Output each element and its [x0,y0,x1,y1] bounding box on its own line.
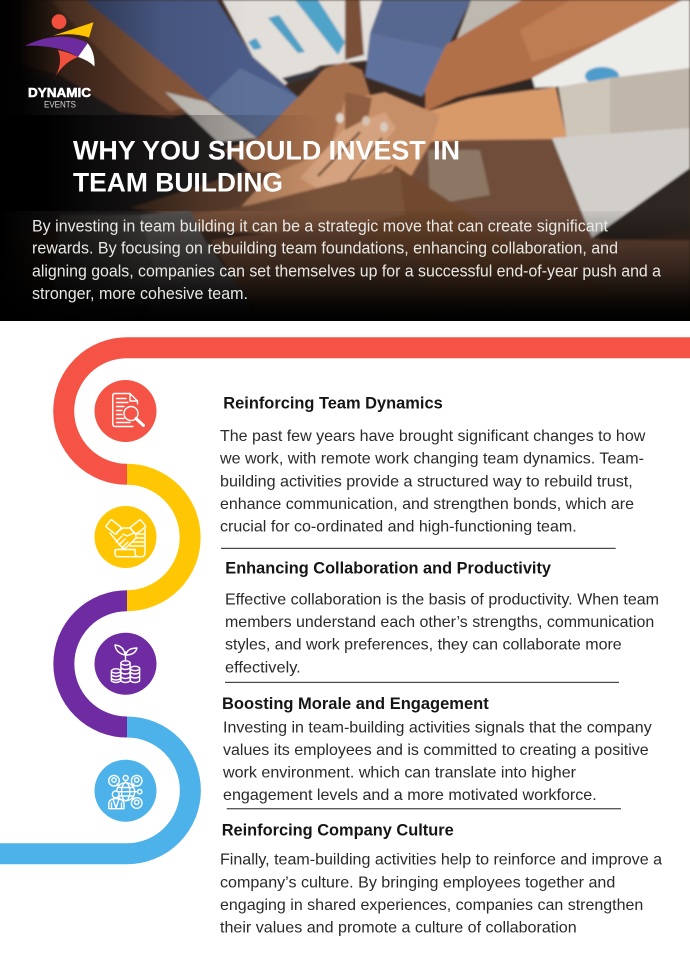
intro paragraph [32,217,661,303]
red path segment [64,348,690,474]
heading: Enhancing Collaboration and Productivity [225,559,552,577]
body text: Investing in team-building activities signals that the company [223,720,652,737]
yellow path segment [127,474,190,601]
body text: values its employees and is committed to creating a positive [223,742,649,759]
body text [220,852,662,936]
body text [225,591,659,676]
body text: company’s culture. By bringing employees together and [220,874,615,891]
body text: members understand each other’s strengths, communication [225,614,654,631]
section: Boosting Morale and Engagement [222,695,652,804]
body text: work environment. which can translate into higher [222,764,577,781]
body text [219,428,646,536]
section: Reinforcing Company Culture [220,822,662,936]
icon: global people network [94,760,156,822]
body text: engaging in shared experiences, companies can strengthen [220,897,643,914]
body text: building activities provide a structured way to rebuild trust, [220,473,633,490]
lower left arm [190,170,405,235]
mid-left arm [132,170,276,216]
body text: engagement levels and a more motivated workforce. [223,787,597,804]
second denim sleeve [369,0,472,50]
icon: document search [94,380,156,442]
logo [25,14,95,109]
purple path segment [64,601,127,727]
left arm [32,0,214,119]
lower-left dark area [62,85,256,214]
heading: Reinforcing Team Dynamics [223,394,443,412]
header photo: stacked hands [0,0,690,321]
logo wordmark: EVENTS [44,99,76,109]
body text: enhance communication, and strengthen bonds, which are [220,496,634,513]
body text: effectively. [225,659,301,676]
icon: handshake agreement [94,506,156,568]
photo overlays [0,0,201,115]
section: Enhancing Collaboration and Productivity [225,559,659,676]
lower right arm [364,164,526,250]
intro paragraph: aligning goals, companies can set themselves up for a successful end-of-year push and a [32,262,661,280]
first hand [224,61,372,174]
logo wordmark [28,86,91,109]
body text: crucial for co-ordinated and high-functioning team. [220,519,577,536]
right white paper [532,0,690,88]
body text: their values and promote a culture of collaboration [220,919,577,936]
body text: Finally, team-building activities help to reinforce and improve a [220,852,662,869]
right upper arm [423,0,611,112]
hand stack [240,92,440,208]
logo wordmark: DYNAMIC [28,86,91,100]
grey gap [455,0,522,40]
shadow below arm [470,78,536,98]
intro paragraph: By investing in team building it can be a strategic move that can create significant [32,217,608,235]
blue path segment [0,727,190,854]
section: Reinforcing Team Dynamics [219,394,646,536]
body text: Effective collaboration is the basis of productivity. When team [225,591,659,608]
lower paper [552,128,690,238]
paper sliver [165,92,258,142]
body text: styles, and work preferences, they can collaborate more [225,637,622,654]
heading: Reinforcing Company Culture [222,822,454,840]
sweater [556,76,612,138]
logo mark [25,14,95,81]
heading: Boosting Morale and Engagement [222,695,489,713]
title: TEAM BUILDING [73,168,283,198]
first denim sleeve [85,0,298,101]
title: WHY YOU SHOULD INVEST IN [73,135,460,165]
forearm [420,87,567,142]
body text: The past few years have brought significant changes to how [220,428,646,445]
icon: coins with growing plant [94,633,156,695]
intro paragraph: rewards. By focusing on rebuilding team foundations, enhancing collaboration, and [32,240,618,258]
top chart paper [222,0,385,85]
wood table [347,138,690,298]
intro paragraph: stronger, more cohesive team. [32,285,248,303]
serpentine timeline path [0,348,690,854]
title [73,135,460,198]
body text: we work, with remote work changing team dynamics. Team- [219,451,644,468]
body text [222,720,652,804]
